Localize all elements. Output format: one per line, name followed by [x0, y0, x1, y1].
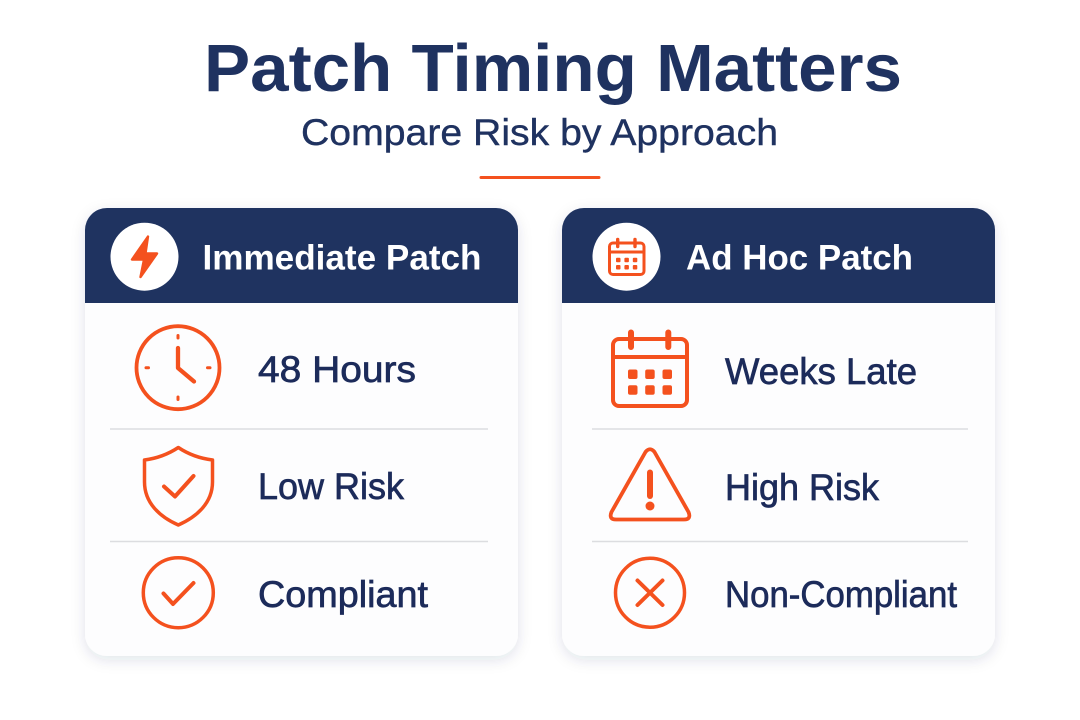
- row: weeks late: [613, 332, 917, 406]
- row: non-compliant: Non-Compliant: [725, 574, 958, 615]
- card header: [85, 208, 518, 303]
- row: compliant: Compliant: [258, 574, 429, 615]
- title: Patch Timing Matters: [204, 31, 902, 106]
- row: 48 hours: [136, 326, 416, 409]
- subtitle: Compare Risk by Approach: [301, 112, 778, 153]
- row: 48 hours: 48 Hours: [258, 349, 416, 390]
- row: non-compliant: [616, 558, 958, 627]
- row: low risk: [144, 448, 404, 525]
- panel: ad hoc patch: [562, 208, 995, 656]
- row: weeks late: Weeks Late: [725, 351, 917, 392]
- card header: Immediate Patch: [202, 238, 482, 278]
- row: compliant: [143, 558, 429, 628]
- title accent rule: [481, 176, 599, 179]
- card header: Ad Hoc Patch: [686, 238, 913, 278]
- card background: [85, 208, 518, 656]
- card background: [562, 208, 995, 656]
- panel: immediate patch: [85, 208, 518, 656]
- row: high risk: High Risk: [725, 467, 879, 508]
- row: low risk: Low Risk: [258, 466, 404, 507]
- row: high risk: [611, 449, 879, 520]
- card header: [562, 208, 995, 303]
